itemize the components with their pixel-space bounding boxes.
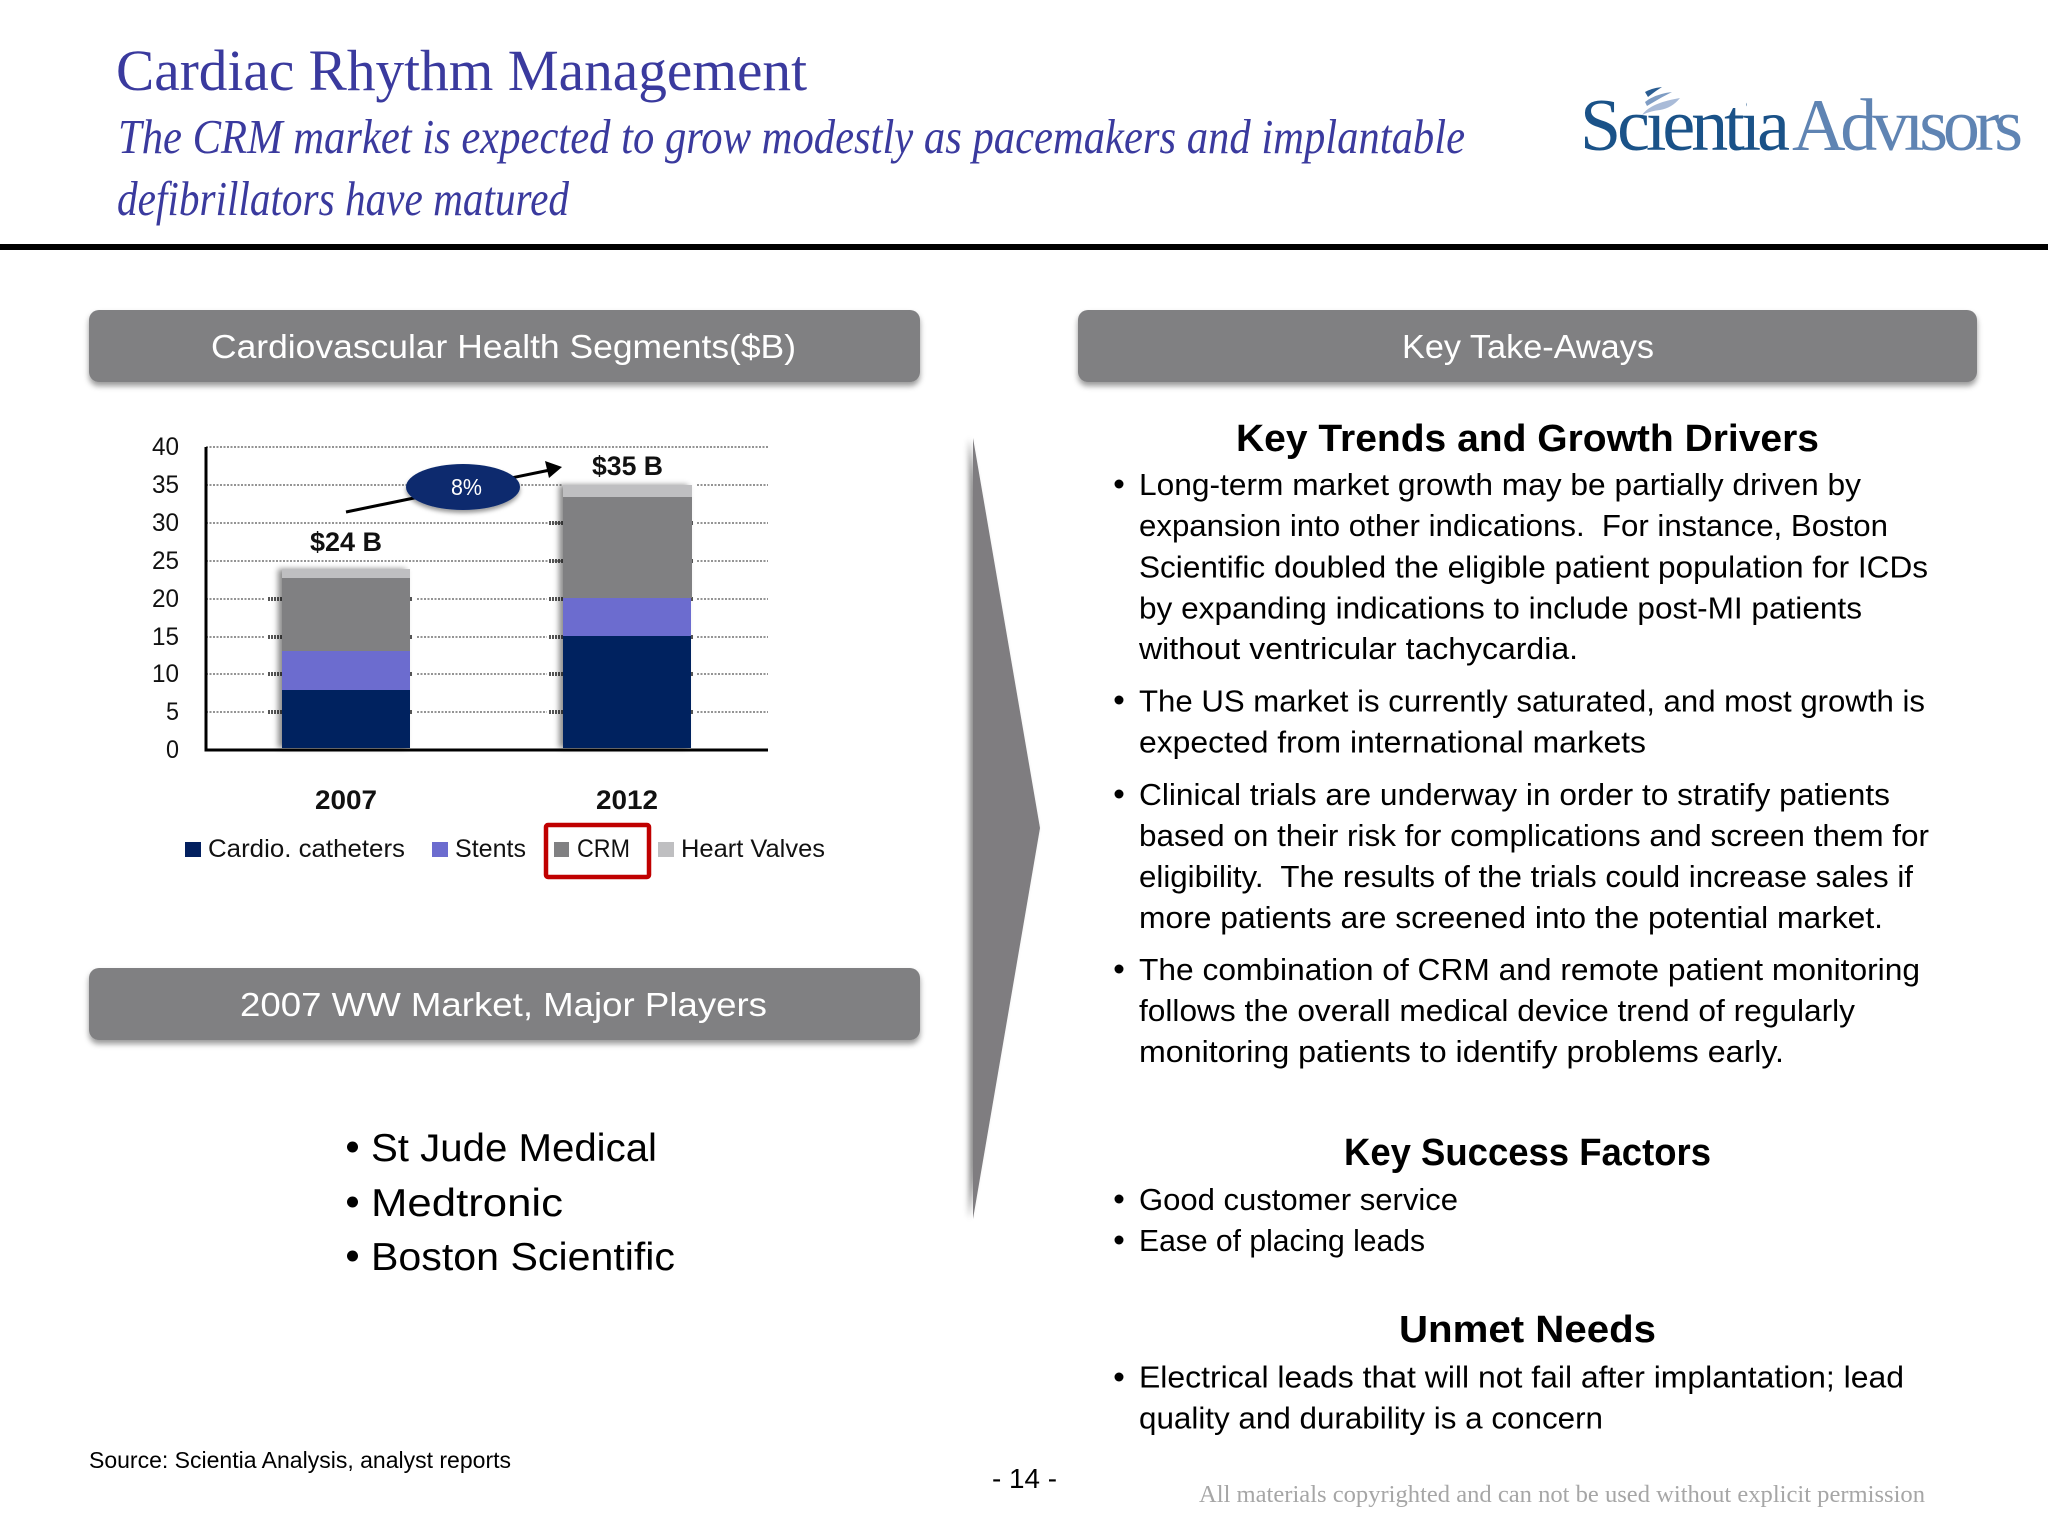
bullet: long-term growth bbox=[1114, 467, 1928, 666]
list: major players: St Jude Medical bbox=[371, 1127, 657, 1170]
list: major players: Boston Scientific bbox=[371, 1236, 675, 1279]
bullet: remote monitoring: follows the overall medical device trend of regularly bbox=[1139, 993, 1855, 1028]
heading: 2007 WW market bbox=[89, 968, 920, 1040]
bullets: success factors: Ease of placing leads bbox=[1139, 1223, 1425, 1258]
bullet: long-term growth: by expanding indications to include post-MI patients bbox=[1139, 590, 1862, 626]
legend: CRM bbox=[577, 835, 630, 863]
y axis labels: 40 bbox=[152, 433, 179, 461]
bar: 2012 bbox=[563, 485, 692, 748]
y axis labels: 25 bbox=[152, 547, 179, 575]
heading: cardiovascular health segments bbox=[89, 310, 920, 382]
y axis labels bbox=[152, 433, 179, 764]
panel: cardiovascular health segments bbox=[89, 310, 920, 877]
bullet: long-term growth: without ventricular tachycardia. bbox=[1138, 631, 1578, 666]
heading: key take-aways: Key Take-Aways bbox=[1402, 329, 1654, 366]
bar: 2007 bbox=[282, 569, 410, 748]
source note: Source: Scientia Analysis, analyst reports bbox=[89, 1447, 511, 1473]
page number: - 14 - bbox=[992, 1463, 1057, 1494]
gridlines bbox=[206, 447, 768, 712]
legend: Cardio. catheters bbox=[208, 835, 405, 863]
legend bbox=[185, 835, 825, 863]
subheading: key trends: Key Trends and Growth Drivers bbox=[1236, 418, 1819, 460]
y axis labels: 10 bbox=[152, 660, 179, 688]
section: key trends and growth drivers bbox=[1114, 418, 1929, 1069]
callout: CRM highlight box bbox=[546, 825, 649, 877]
subtitle bbox=[117, 109, 1465, 226]
x axis labels: 2007 bbox=[315, 785, 377, 815]
x axis labels: 2012 bbox=[596, 785, 658, 815]
arrow: left to right chevron bbox=[973, 438, 1040, 1219]
heading: cardiovascular health segments: Cardiovascular Health Segments($B) bbox=[211, 329, 796, 366]
stacked bar chart bbox=[152, 433, 825, 877]
bullet: US market: The US market is currently saturated, and most growth is bbox=[1139, 684, 1925, 718]
bullet: remote monitoring bbox=[1114, 952, 1920, 1069]
y axis labels: 20 bbox=[152, 585, 179, 613]
bullet: clinical trials: Clinical trials are underway in order to stratify patients bbox=[1139, 777, 1890, 812]
y axis labels: 35 bbox=[152, 471, 179, 499]
bullet: long-term growth: Long-term market growth may be partially driven by bbox=[1139, 467, 1862, 502]
logo: Scientia Advisors bbox=[1580, 84, 2023, 167]
section: key success factors bbox=[1114, 1132, 1711, 1258]
axes bbox=[206, 447, 768, 750]
bullet: remote monitoring: The combination of CRM and remote patient monitoring bbox=[1139, 952, 1920, 987]
bullet: remote monitoring: monitoring patients to identify problems early. bbox=[1139, 1034, 1784, 1069]
subtitle: defibrillators have matured bbox=[117, 171, 569, 226]
bullet: electrical leads: Electrical leads that will not fail after implantation; lead bbox=[1139, 1360, 1904, 1394]
callout: 8%: 8% bbox=[451, 474, 482, 500]
list: major players bbox=[347, 1127, 675, 1279]
bullet: clinical trials bbox=[1114, 777, 1929, 935]
subheading: unmet needs: Unmet Needs bbox=[1399, 1309, 1656, 1351]
y axis labels: 5 bbox=[166, 698, 179, 726]
section: unmet needs bbox=[1114, 1309, 1904, 1436]
callout: 8% bbox=[406, 464, 520, 510]
panel: key take-aways bbox=[1078, 310, 1977, 1436]
icon: logo swoosh bbox=[1642, 84, 1922, 115]
y axis labels: 0 bbox=[166, 736, 179, 764]
bullet: electrical leads: quality and durability is a concern bbox=[1139, 1400, 1603, 1436]
legend: Stents bbox=[455, 835, 526, 863]
logo: Scientia Advisors: Scientia bbox=[1580, 85, 1790, 167]
list: major players: Medtronic bbox=[371, 1182, 563, 1225]
title block bbox=[116, 38, 1465, 226]
bullet: US market bbox=[1114, 684, 1925, 760]
bullet: clinical trials: based on their risk for complications and screen them for bbox=[1139, 818, 1929, 853]
x axis labels bbox=[315, 785, 658, 815]
y axis labels: 15 bbox=[152, 623, 179, 651]
logo: Scientia Advisors: Advisors bbox=[1792, 85, 2023, 167]
heading: key take-aways bbox=[1078, 310, 1977, 382]
panel: major players bbox=[89, 968, 920, 1279]
bullet: long-term growth: expansion into other indications. For instance, Boston bbox=[1139, 508, 1888, 543]
bullet: electrical leads bbox=[1114, 1360, 1904, 1436]
subtitle: The CRM market is expected to grow modestly as pacemakers and implantable bbox=[118, 109, 1465, 164]
bullets: success factors: Good customer service bbox=[1139, 1182, 1458, 1217]
copyright note: All materials copyrighted and can not be used without explicit permission bbox=[1199, 1482, 1925, 1508]
title: Cardiac Rhythm Management bbox=[116, 38, 807, 103]
bullets: success factors bbox=[1114, 1182, 1458, 1258]
bullet: US market: expected from international markets bbox=[1139, 724, 1646, 760]
y axis labels: 30 bbox=[152, 509, 179, 537]
value label: $24 B: $24 B bbox=[310, 527, 382, 557]
value label: $35 B: $35 B bbox=[592, 451, 663, 481]
subheading: key success factors: Key Success Factors bbox=[1344, 1132, 1711, 1174]
bullet: clinical trials: eligibility. The results of the trials could increase sales if bbox=[1139, 859, 1913, 894]
arrow: growth bbox=[346, 461, 562, 512]
legend: Heart Valves bbox=[681, 835, 825, 863]
bullet: clinical trials: more patients are screened into the potential market. bbox=[1139, 900, 1883, 935]
heading: 2007 WW market: 2007 WW Market, Major Players bbox=[240, 987, 767, 1024]
bullet: long-term growth: Scientific doubled the eligible patient population for ICDs bbox=[1139, 550, 1928, 584]
